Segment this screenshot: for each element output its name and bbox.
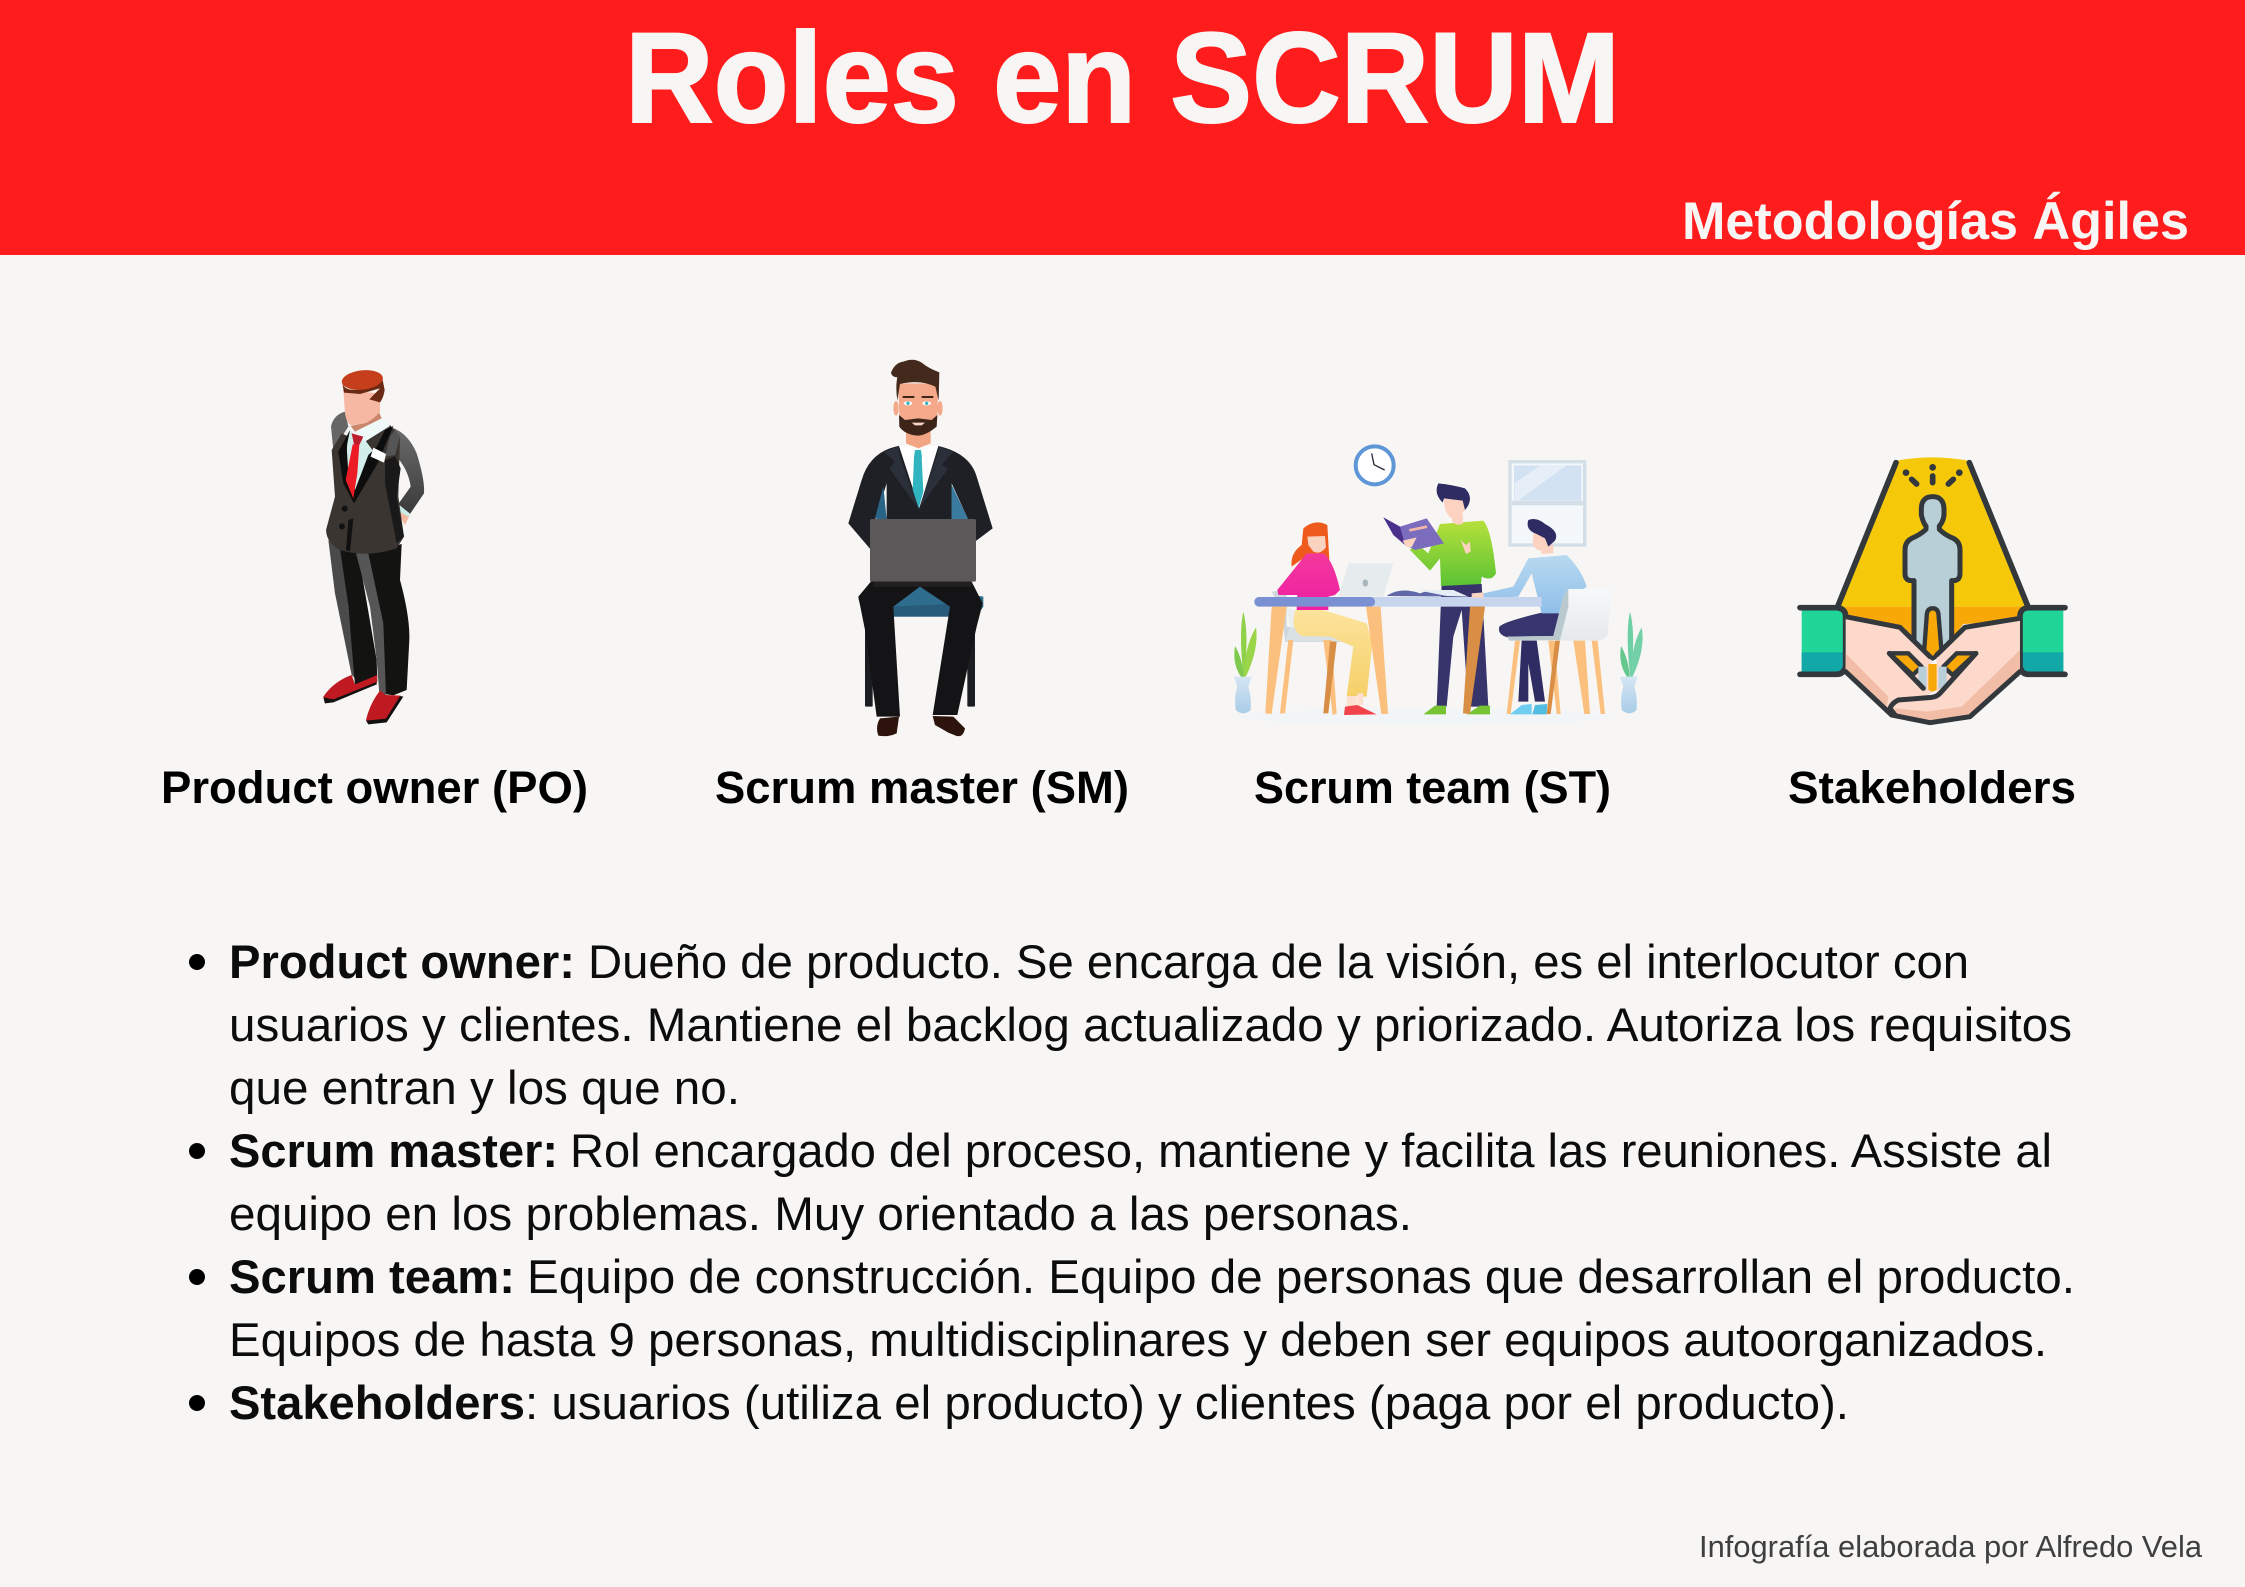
bullet item: scrum master: Scrum master: (229, 1124, 558, 1177)
wall clock (1356, 446, 1394, 484)
header band (0, 0, 2245, 255)
bullet item: product owner (189, 935, 2072, 1114)
icon: scrum master figure (848, 360, 993, 736)
bullet item: scrum team: Scrum team: (229, 1250, 515, 1303)
label: scrum team: Scrum team (ST) (1254, 762, 1611, 813)
table (1254, 590, 1542, 714)
window (1510, 462, 1585, 545)
title: Roles en SCRUM (625, 7, 1620, 150)
bullet item: scrum master: equipo en los problemas. Muy orientado a las personas. (229, 1187, 1412, 1240)
bullet item: scrum master (189, 1124, 2052, 1240)
woman at laptop (1272, 522, 1393, 715)
label: stakeholders: Stakeholders (1788, 762, 2076, 813)
bullet item: product owner: que entran y los que no. (229, 1061, 740, 1114)
plant left (1234, 612, 1257, 713)
bullet item: stakeholders: Stakeholders (229, 1376, 525, 1429)
bullet item: product owner: Product owner: (229, 935, 575, 988)
footer credit: Infografía elaborada por Alfredo Vela (1699, 1529, 2203, 1564)
bullet item: stakeholders: : usuarios (utiliza el producto) y clientes (paga por el producto). (525, 1376, 1849, 1429)
bullet item: product owner: usuarios y clientes. Mantiene el backlog actualizado y priorizado. Autoriza los requisitos (229, 998, 2072, 1051)
bullet list: role descriptions (189, 935, 2075, 1429)
bullet item: scrum team: Equipo de construcción. Equipo de personas que desarrollan el producto. (527, 1250, 2075, 1303)
plant right (1620, 612, 1643, 713)
man seated right (1483, 519, 1612, 714)
icon: stakeholders hands and figure (1800, 457, 2065, 723)
label: scrum master: Scrum master (SM) (715, 762, 1129, 813)
icon: product owner figure (323, 368, 424, 724)
bullet item: product owner: Dueño de producto. Se encarga de la visión, es el interlocutor con (588, 935, 1969, 988)
icon: scrum team illustration (1234, 446, 1643, 725)
label: product owner: Product owner (PO) (161, 762, 588, 813)
bullet item: scrum team: Equipos de hasta 9 personas, multidisciplinares y deben ser equipos autoorganizados. (229, 1313, 2047, 1366)
standing man with book (1383, 483, 1496, 714)
bullet item: scrum team (189, 1250, 2075, 1366)
subtitle: Metodologías Ágiles (1682, 191, 2189, 251)
bullet item: scrum master: Rol encargado del proceso, mantiene y facilita las reuniones. Assiste al (570, 1124, 2052, 1177)
